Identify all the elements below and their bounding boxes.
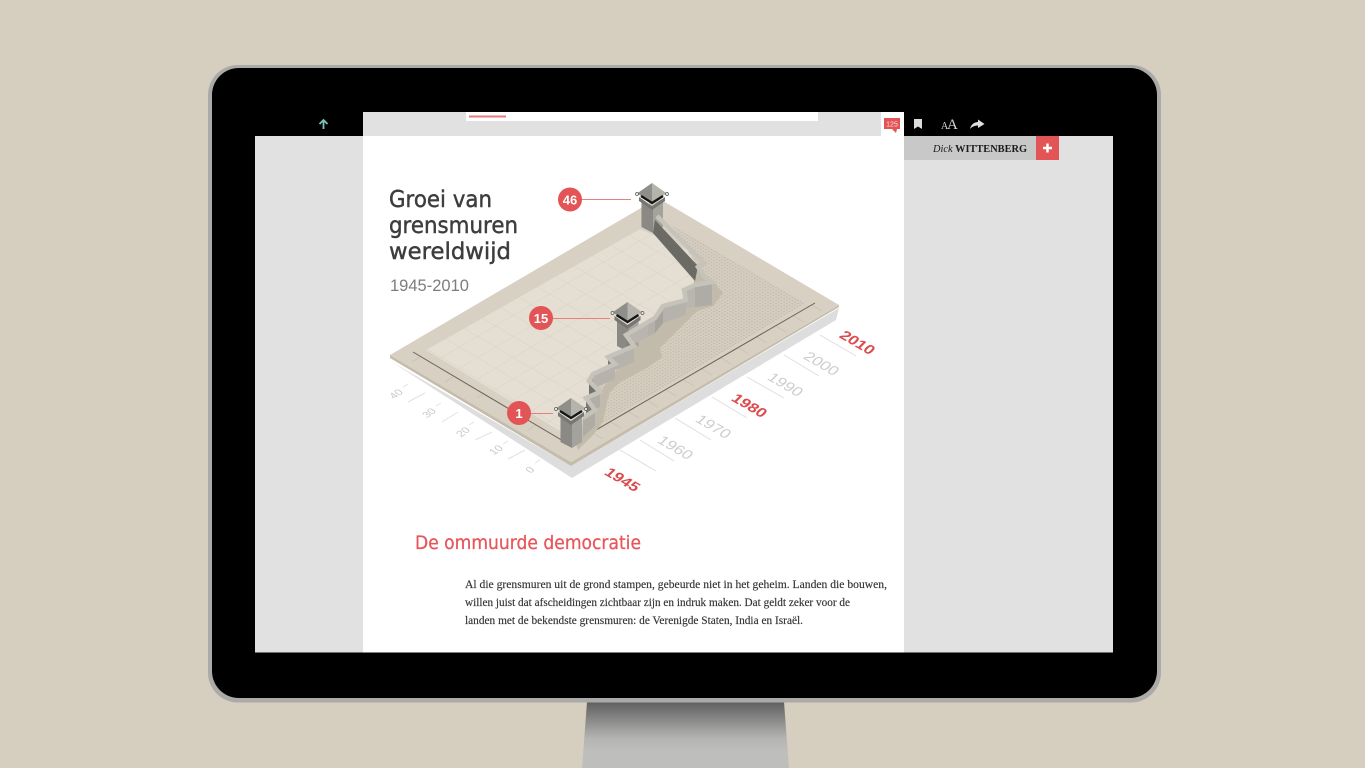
axis labels years: 2000	[800, 349, 842, 379]
icon: comment badge	[884, 118, 900, 133]
title	[389, 187, 518, 265]
title: grensmuren	[389, 213, 518, 239]
axis labels count: 10	[487, 444, 506, 457]
platform	[390, 198, 839, 466]
axis labels count: 30	[420, 407, 439, 420]
icon: share arrow	[970, 120, 984, 129]
tower 46	[636, 183, 668, 233]
icon: text size	[941, 117, 958, 133]
body text: willen juist dat afscheidingen zichtbaar zijn en indruk maken. Dat geldt zeker voor de	[465, 597, 850, 609]
axis labels years: 1960	[654, 433, 696, 463]
callout 46: 46	[563, 192, 577, 208]
axis labels count: 40	[387, 388, 406, 401]
isometric chart: border walls	[387, 183, 878, 495]
axis labels count: 0	[523, 465, 538, 475]
author bar	[904, 136, 1059, 160]
axis labels years: 2010	[836, 328, 878, 358]
tower 15	[611, 302, 644, 352]
callout 1: 1	[515, 406, 523, 421]
body text	[465, 579, 887, 627]
monitor stand	[582, 702, 789, 768]
subtitle years: 1945-2010	[390, 276, 469, 295]
axis labels years	[601, 328, 878, 495]
callout 15	[529, 306, 610, 330]
axis labels years: 1945	[601, 465, 644, 495]
title: wereldwijd	[389, 239, 511, 265]
axis ticks left	[403, 384, 540, 463]
icon: comment badge: 125	[886, 122, 898, 128]
axis labels count	[387, 388, 538, 475]
axis ticks bottom	[620, 335, 856, 471]
floor shadow	[392, 308, 839, 478]
icon: text size: A	[947, 117, 958, 133]
axis labels years: 1980	[728, 391, 770, 421]
wall	[583, 216, 712, 437]
monitor frame	[208, 65, 1161, 702]
wall top edge	[583, 216, 712, 418]
screen	[255, 136, 1113, 652]
title: Groei van	[389, 187, 492, 213]
axis labels years: 1990	[764, 370, 806, 400]
axis labels years: 1970	[692, 412, 734, 442]
body text: landen met de bekendste grensmuren: de Verenigde Staten, India en Israël.	[465, 615, 803, 627]
body text: Al die grensmuren uit de grond stampen, gebeurde niet in het geheim. Landen die bouwen,	[465, 579, 887, 591]
axis labels count: 20	[454, 426, 473, 439]
article column	[363, 136, 904, 652]
section heading: De ommuurde democratie	[415, 532, 641, 554]
top navigation strip	[363, 112, 904, 136]
author bar: Dick WITTENBERG	[932, 144, 1027, 155]
callout 46	[558, 188, 631, 212]
wall shadow	[575, 266, 723, 450]
icon: bookmark	[914, 119, 922, 129]
icon: up arrow	[320, 120, 328, 129]
callout 15: 15	[534, 311, 548, 326]
plus button	[1036, 136, 1059, 160]
tower 1	[554, 398, 588, 448]
callout 1	[507, 401, 553, 425]
icon: text size: A	[941, 121, 949, 132]
